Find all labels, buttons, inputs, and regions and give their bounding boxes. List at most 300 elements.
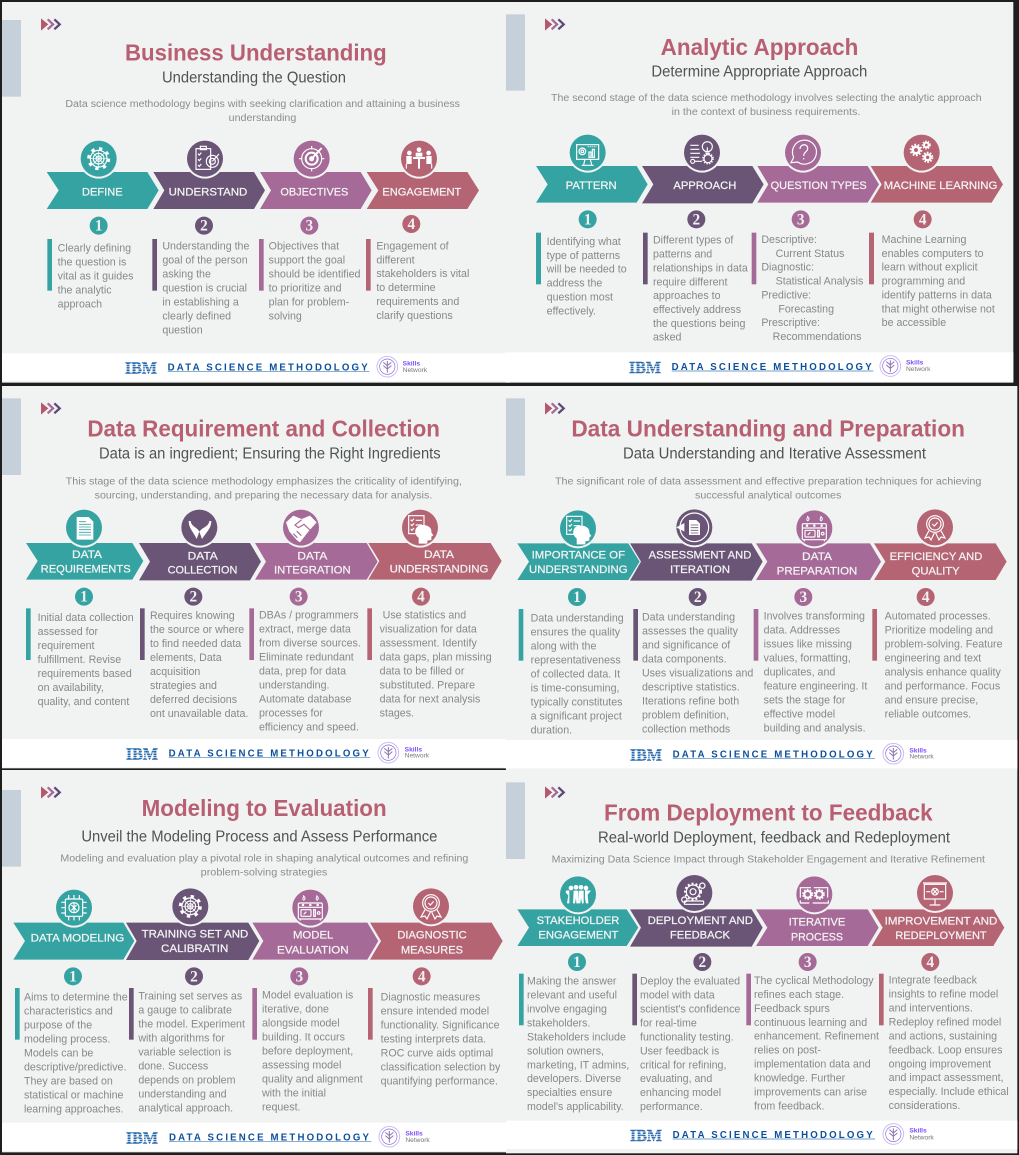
body text: Initial data collection (38, 612, 134, 624)
accent bar (129, 988, 134, 1040)
body text: developers. Diverse (527, 1073, 621, 1085)
body text: performance. (640, 1101, 703, 1113)
body text: model's applicability. (527, 1101, 624, 1113)
body text: typically constitutes (531, 697, 622, 709)
chevron marks (41, 18, 60, 31)
step 3: question types (752, 133, 879, 343)
body text: Iterations refine both (642, 695, 739, 707)
accent bar (367, 608, 372, 660)
label: DEPLOYMENT AND (648, 915, 753, 927)
body text: quality, and content (38, 696, 129, 708)
number badge: 1 (573, 954, 581, 971)
footer band (505, 352, 1013, 382)
body text: characteristics and (24, 1005, 113, 1017)
panel: Data Requirement and Collection (2, 386, 510, 768)
number badge (413, 967, 431, 985)
body text: data gaps, plan missing (380, 652, 492, 664)
label: UNDERSTAND (169, 186, 247, 198)
footer logos: IBM (630, 1126, 662, 1145)
number badge (568, 588, 586, 606)
footer logos: Skills (405, 746, 422, 753)
label: EFFICIENCY AND (890, 551, 982, 563)
label: ITERATION (670, 564, 730, 576)
body text: approaches to (653, 290, 721, 302)
icon: gears (902, 133, 942, 173)
label: DATA (297, 550, 328, 562)
chevron marks (41, 402, 60, 415)
footer logos: IBM (629, 358, 661, 377)
body text: a gauge to calibrate (138, 1004, 232, 1016)
label: INTEGRATION (274, 565, 351, 577)
body text: asking the (162, 269, 211, 281)
arrow (47, 172, 159, 209)
body text: goal of the person (162, 255, 248, 267)
accent bar (26, 608, 31, 660)
label: APPROACH (673, 180, 736, 192)
icon: monitor with target (915, 873, 955, 913)
accent bar (15, 988, 20, 1040)
number badge (185, 967, 203, 985)
accent bar (368, 988, 373, 1040)
icon: head with checklist (558, 508, 598, 548)
body text: collection methods (642, 723, 730, 735)
intro text: understanding (229, 113, 296, 124)
body text: Descriptive: (761, 234, 817, 246)
intro text: Maximizing Data Science Impact through Stakeholder Engagement and Iterative Refinement (552, 854, 985, 865)
body text: model with data (640, 990, 715, 1002)
step 1: define (47, 139, 159, 310)
subtitle: Real-world Deployment, feedback and Redeployment (598, 829, 951, 846)
footer logos (126, 742, 430, 764)
body text: sets the stage for (764, 694, 846, 706)
step 3: iterative process (746, 874, 879, 1112)
body text: data. Addresses (764, 624, 840, 636)
chevron marks (41, 786, 60, 799)
body text: Diagnostic measures (381, 991, 480, 1003)
body text: solution owners, (527, 1045, 604, 1057)
body text: relevant and useful (527, 990, 617, 1002)
label: FEEDBACK (670, 930, 731, 942)
label: DEFINE (82, 186, 123, 198)
body text: relationships in data (653, 262, 748, 274)
chevron marks (545, 402, 564, 415)
body text: ensure intended model (381, 1005, 489, 1017)
body text: Statistical Analysis (776, 276, 863, 288)
number badge: 1 (95, 218, 103, 235)
icon: document (64, 508, 104, 548)
icon: meeting people (399, 139, 439, 179)
body text: Automate database (259, 694, 351, 706)
accent bar (872, 609, 877, 661)
body text: vital as it guides (58, 271, 133, 283)
body text: Requires knowing (150, 610, 235, 622)
body text: They are based on (24, 1075, 113, 1087)
body text: alongside model (262, 1017, 340, 1029)
body text: plan for problem- (269, 296, 350, 308)
body text: request. (262, 1101, 301, 1113)
arrow (517, 543, 640, 580)
body text: different (376, 254, 415, 266)
number badge: 4 (418, 968, 426, 985)
body text: scientist's confidence (640, 1004, 740, 1016)
body text: considerations. (889, 1100, 960, 1112)
body text: Uses visualizations and (642, 667, 753, 679)
footer logos: IBM (125, 358, 157, 377)
body text: ensures the quality (531, 627, 621, 639)
body text: Forecasting (778, 303, 834, 315)
step 4: diagnostic measures (368, 886, 503, 1087)
body text: critical for refining, (640, 1059, 726, 1071)
label (277, 930, 349, 956)
body text: assessed for (38, 626, 99, 638)
footer band (505, 740, 1017, 768)
number badge (687, 210, 705, 228)
body text: Objectives that (269, 241, 339, 253)
subtitle: Data Understanding and Iterative Assessment (623, 445, 927, 462)
intro text: successful analytical outcomes (695, 491, 841, 502)
body text: Engagement of (376, 240, 449, 252)
footer logos: IBM (126, 1129, 158, 1148)
footer logos: DATA SCIENCE METHODOLOGY (169, 749, 369, 760)
body text: with the initial (261, 1087, 326, 1099)
footer logos: Network (909, 1134, 934, 1141)
icon: people group (558, 874, 598, 914)
label: IMPROVEMENT AND (885, 916, 997, 928)
subtitle: Understanding the Question (162, 70, 346, 87)
accent bar (252, 988, 257, 1040)
step 2: understand (152, 139, 265, 336)
icon: monitor with charts (568, 133, 608, 173)
number badge (921, 953, 939, 971)
number badge: 2 (190, 968, 198, 985)
footer band (506, 1121, 1017, 1149)
label: REDEPLOYMENT (895, 930, 987, 942)
label (649, 549, 751, 576)
body text: clearly defined (162, 310, 231, 322)
body text: to prioritize and (269, 282, 342, 294)
body text: deferred decisions (150, 694, 237, 706)
sidebar tab (2, 398, 21, 475)
body text: the questions being (653, 318, 745, 330)
body text: specialties ensure (527, 1087, 612, 1099)
body text: stakeholders. (527, 1017, 590, 1029)
body text: representativeness (531, 655, 621, 667)
label: DATA (72, 549, 103, 561)
label: QUESTION TYPES (771, 180, 867, 192)
body text: Integrate feedback (889, 975, 978, 987)
body text: requirements based (38, 668, 132, 680)
arrow (756, 543, 881, 580)
number badge: 3 (295, 589, 303, 606)
body text: along with the (531, 641, 596, 653)
body text: the analytic (58, 284, 112, 296)
icon: award ribbon (411, 886, 451, 926)
body text: feedback. Loop ensures (889, 1044, 1002, 1056)
body text: Understanding the (162, 241, 249, 253)
body text: question (162, 324, 203, 336)
arrow (260, 172, 372, 209)
body text: improvements can arise (754, 1086, 867, 1098)
body text: implementation data and (754, 1059, 871, 1071)
body text: Model evaluation is (262, 989, 353, 1001)
sidebar tab (506, 14, 525, 91)
number badge: 4 (926, 954, 934, 971)
step 1: pattern (536, 133, 648, 317)
number badge (693, 953, 711, 971)
footer logos: Network (906, 366, 931, 373)
accent bar (259, 239, 264, 291)
accent bar (746, 974, 751, 1025)
body text: enhancing model (640, 1087, 721, 1099)
body text: effective model (764, 708, 835, 720)
label (274, 550, 351, 577)
body text: Feedback spurs (754, 1003, 830, 1015)
body text: insights to refine model (889, 989, 998, 1001)
body text: Eliminate redundant (259, 652, 354, 664)
body text: variable selection is (138, 1046, 231, 1058)
number badge (402, 215, 420, 233)
title: From Deployment to Feedback (604, 799, 933, 825)
body text: ROC curve aids optimal (381, 1047, 493, 1059)
body text: engineering and text (885, 652, 981, 664)
icon: gear web (79, 139, 119, 179)
label: MODEL (293, 930, 333, 942)
body text: clarify questions (376, 310, 453, 322)
body text: from feedback. (754, 1100, 824, 1112)
chevron marks (545, 18, 564, 31)
icon: cupped hands (179, 508, 219, 548)
footer logos: DATA SCIENCE METHODOLOGY (672, 362, 872, 373)
step 2: approach (642, 133, 764, 344)
body text: depends on problem (138, 1074, 236, 1086)
subtitle: Data is an ingredient; Ensuring the Right Ingredients (99, 445, 441, 462)
body text: will be needed to (546, 264, 627, 276)
number badge: 3 (295, 968, 303, 985)
footer logos: Network (405, 753, 430, 760)
body text: building. It occurs (262, 1031, 345, 1043)
number badge: 1 (80, 589, 88, 606)
body text: programming and (882, 276, 965, 288)
body text: statistical or machine (24, 1089, 124, 1101)
number badge (290, 967, 308, 985)
body text: Use statistics and (383, 610, 466, 622)
number badge: 3 (305, 218, 313, 235)
body text: for real-time (640, 1017, 697, 1029)
body text: to determine (376, 282, 436, 294)
step 4: engagement (366, 139, 479, 322)
step 1: importance of understanding (517, 508, 640, 737)
icon: handshake (281, 508, 321, 548)
body text: fulfillment. Revise (38, 654, 121, 666)
accent bar (519, 609, 523, 661)
body text: processes for (259, 708, 323, 720)
footer logos: IBM (126, 745, 158, 764)
accent bar (536, 233, 541, 284)
number badge: 4 (922, 589, 930, 606)
label: CALIBRATIN (161, 943, 228, 955)
intro text: in the context of business requirements. (672, 107, 860, 118)
body text: patterns and (653, 249, 712, 261)
label (885, 916, 997, 942)
body text: and impact assessment, (889, 1072, 1004, 1084)
arrow (368, 543, 502, 580)
icon: clipboard target (185, 139, 225, 179)
arrow (874, 543, 1007, 580)
body text: learning approaches. (24, 1103, 124, 1115)
body text: testing interprets data. (381, 1033, 486, 1045)
body text: visualization for data (380, 624, 477, 636)
number badge: 1 (573, 589, 581, 606)
icon: question bubble (783, 133, 823, 173)
body text: strategies and (150, 680, 217, 692)
body text: values, formatting, (764, 652, 851, 664)
body text: Aims to determine the (24, 991, 128, 1003)
number badge (914, 210, 932, 228)
body text: Diagnostic: (761, 262, 814, 274)
arrow (13, 923, 134, 960)
body text: the question is (58, 257, 126, 269)
label (529, 549, 628, 576)
accent bar (633, 609, 638, 661)
footer logos: Network (405, 1137, 430, 1144)
accent bar (879, 974, 884, 1025)
accent bar (366, 239, 371, 291)
label: EVALUATION (277, 944, 349, 956)
footer logos (630, 1124, 934, 1145)
step 4: improvement and redeployment (872, 873, 1009, 1112)
body text: learn without explicit (882, 262, 978, 274)
footer band (2, 739, 510, 767)
step 2: assessment and iteration (630, 507, 763, 735)
body text: to find needed data (150, 638, 241, 650)
sidebar tab (2, 790, 21, 867)
arrow (126, 923, 259, 960)
body text: ongoing improvement (889, 1058, 991, 1070)
sidebar tab (2, 20, 21, 97)
step 1: stakeholder engagement (517, 874, 638, 1113)
body text: solving (269, 310, 302, 322)
body text: Data understanding (531, 613, 624, 625)
label: MACHINE LEARNING (884, 180, 997, 192)
accent bar (632, 974, 637, 1025)
number badge: 2 (692, 211, 700, 228)
footer band (2, 1123, 510, 1151)
label: PROCESS (791, 931, 843, 943)
body text: the model. Experiment (138, 1018, 245, 1030)
arrow (367, 172, 479, 209)
label: UNDERSTANDING (529, 564, 628, 576)
footer logos: DATA SCIENCE METHODOLOGY (673, 750, 873, 761)
footer logos (629, 356, 931, 377)
body text: ont unavailable data. (150, 708, 248, 720)
arrow (757, 166, 879, 203)
body text: Redeploy refined model (889, 1016, 1001, 1028)
body text: data for next analysis (380, 694, 480, 706)
body text: modeling process. (24, 1033, 110, 1045)
label: REQUIREMENTS (41, 563, 131, 575)
intro text: This stage of the data science methodology emphasizes the criticality of identifying, (66, 476, 462, 487)
body text: data components. (642, 653, 727, 665)
step 2: deployment and feedback (630, 873, 763, 1113)
number badge: 3 (804, 954, 812, 971)
body text: issues like missing (764, 638, 852, 650)
label: QUALITY (912, 565, 960, 577)
number badge (75, 588, 93, 606)
step 4: data understanding (367, 508, 502, 720)
label (789, 917, 845, 943)
step 3: objectives (259, 139, 372, 322)
body text: knowledge. Further (754, 1073, 846, 1085)
body text: building and analysis. (764, 722, 866, 734)
label: ENGAGEMENT (382, 186, 462, 198)
step 1: data modeling (13, 888, 134, 1115)
number badge: 2 (200, 218, 208, 235)
body text: and interventions. (889, 1003, 973, 1015)
label (168, 550, 237, 577)
body text: Machine Learning (882, 234, 966, 246)
number badge (184, 588, 202, 606)
intro text: Data science methodology begins with seeking clarification and attaining a business (65, 99, 460, 110)
icon: cycle gears (794, 874, 834, 914)
body text: requirement (38, 640, 95, 652)
number badge (412, 588, 430, 606)
body text: functionality testing. (640, 1031, 734, 1043)
icon: document with arrow (674, 507, 714, 547)
body text: be accessible (882, 317, 946, 329)
label (648, 915, 753, 942)
body text: data to be filled or (380, 666, 465, 678)
number badge: 1 (69, 968, 77, 985)
arrow (630, 909, 763, 947)
label: DIAGNOSTIC (397, 930, 467, 942)
body text: with algorithms for (137, 1032, 225, 1044)
step 4: machine learning (869, 133, 1003, 329)
label: DATA (424, 549, 455, 561)
body text: analysis enhance quality (885, 666, 1001, 678)
panel: Data Understanding and Preparation (505, 386, 1017, 770)
body text: enables computers to (882, 248, 984, 260)
body text: duration. (531, 725, 572, 737)
title: Modeling to Evaluation (142, 795, 387, 821)
body text: understanding. (259, 680, 330, 692)
accent bar (519, 974, 524, 1025)
body text: address the (547, 278, 602, 290)
body text: purpose of the (24, 1019, 92, 1031)
body text: and performance. Focus (885, 680, 1000, 692)
body text: and actions, sustaining (889, 1030, 997, 1042)
intro text: The second stage of the data science methodology involves selecting the analytic approach (551, 93, 982, 104)
label (390, 549, 488, 575)
body text: functionality. Significance (381, 1019, 500, 1031)
title: Business Understanding (125, 40, 387, 66)
body text: problem definition, (642, 709, 729, 721)
label (142, 928, 248, 955)
title: Data Requirement and Collection (87, 416, 440, 442)
number badge (689, 588, 707, 606)
footer logos: Skills (909, 747, 927, 754)
accent bar (140, 608, 145, 660)
arrow (139, 543, 261, 580)
label: ENGAGEMENT (538, 930, 619, 942)
body text: effectively address (653, 304, 741, 316)
icon: award ribbon (915, 507, 955, 547)
number badge: 3 (797, 211, 805, 228)
arrow (756, 909, 879, 946)
body text: Deploy the evaluated (640, 976, 740, 988)
body text: quality and alignment (262, 1073, 363, 1085)
label: ASSESSMENT AND (649, 549, 751, 561)
body text: from diverse sources. (259, 638, 361, 650)
